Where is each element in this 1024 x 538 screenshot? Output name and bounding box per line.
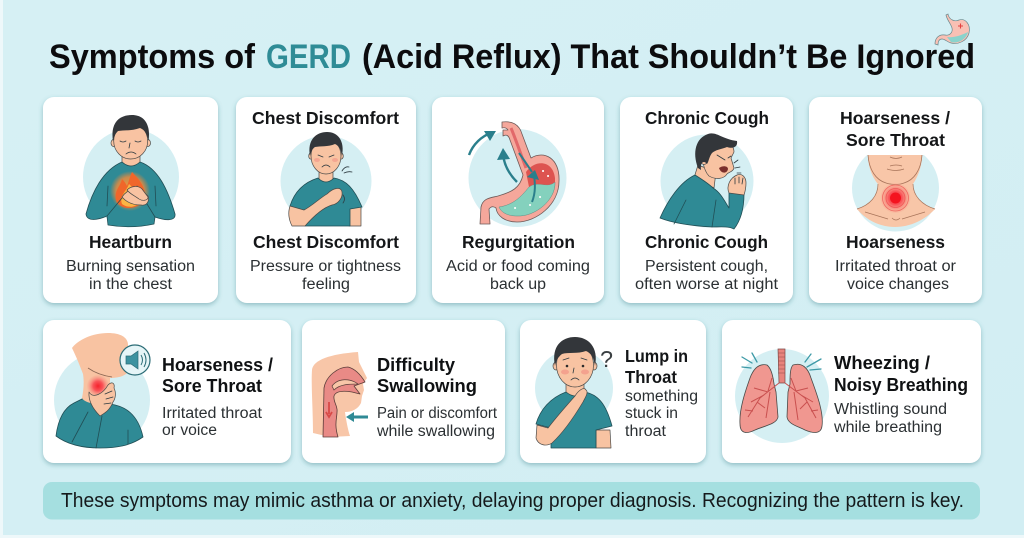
panel: wheezing	[722, 320, 981, 463]
heading: Lump in	[625, 346, 688, 366]
title: Symptoms of	[49, 38, 256, 76]
heading: Noisy Breathing	[834, 374, 968, 395]
heading: Chronic Cough	[645, 232, 768, 252]
icon: person holding chest	[280, 132, 372, 226]
heading: Sore Throat	[162, 375, 262, 396]
description	[250, 258, 401, 293]
card background	[722, 320, 981, 463]
title	[49, 38, 975, 76]
heading: Hoarseness	[846, 232, 945, 252]
description: feeling	[302, 276, 350, 293]
heading	[377, 354, 477, 396]
description: back up	[490, 276, 546, 293]
description: Pain or discomfort	[377, 405, 498, 422]
icon: stomach with reflux arrows	[468, 122, 566, 227]
description: Whistling sound	[834, 401, 947, 418]
description	[446, 258, 590, 293]
icon: person with burning chest	[83, 115, 179, 227]
top label	[840, 108, 950, 150]
description: Irritated throat	[162, 405, 263, 422]
icon: worried person touching throat: ?	[600, 346, 613, 372]
title: GERD	[266, 38, 351, 76]
panel: hoarseness and sore throat	[43, 320, 291, 463]
panel: heartburn	[43, 97, 218, 303]
heading	[162, 354, 273, 396]
description: throat	[625, 423, 667, 440]
card background	[520, 320, 706, 463]
description: stuck in	[625, 405, 678, 422]
description: Persistent cough,	[645, 258, 768, 275]
top label: Chronic Cough	[645, 108, 769, 128]
description: or voice	[162, 422, 217, 439]
icon: lungs	[735, 349, 829, 443]
callout banner	[43, 482, 980, 520]
icon: person coughing	[660, 133, 754, 229]
description	[376, 405, 498, 440]
description: Acid or food coming	[446, 258, 590, 275]
top label: Hoarseness /	[840, 108, 950, 128]
icon: small stomach	[935, 14, 969, 45]
card background	[302, 320, 505, 463]
icon: throat cross-section with arrow	[312, 352, 368, 437]
callout banner: These symptoms may mimic asthma or anxiety, delaying proper diagnosis. Recognizing the pattern is key.	[61, 490, 964, 512]
description	[66, 258, 195, 293]
description	[835, 258, 956, 293]
card background	[43, 320, 291, 463]
description: while swallowing	[376, 423, 495, 440]
icon: worried person touching throat	[535, 337, 613, 448]
description: Pressure or tightness	[250, 258, 401, 275]
heading: Heartburn	[89, 232, 172, 252]
description	[635, 258, 779, 293]
heading: Chest Discomfort	[253, 232, 399, 252]
heading: Difficulty	[377, 354, 456, 375]
description: while breathing	[833, 419, 942, 436]
description: often worse at night	[635, 276, 779, 293]
description: Burning sensation	[66, 258, 195, 275]
card background	[809, 97, 982, 303]
description	[833, 401, 947, 436]
heading	[834, 352, 968, 395]
top label: Sore Throat	[846, 130, 945, 150]
description	[625, 388, 698, 440]
card background	[236, 97, 416, 303]
heading: Hoarseness /	[162, 354, 273, 375]
title: (Acid Reflux) That Shouldn’t Be Ignored	[362, 38, 975, 76]
heading: Wheezing /	[834, 352, 930, 373]
heading: Regurgitation	[462, 232, 575, 252]
panel: hoarseness	[809, 97, 982, 303]
panel: regurgitation	[432, 97, 604, 303]
description: something	[625, 388, 698, 405]
description: in the chest	[89, 276, 173, 293]
heading	[625, 346, 688, 387]
heading: Throat	[625, 367, 677, 387]
top label: Chest Discomfort	[252, 108, 399, 128]
description: voice changes	[847, 276, 949, 293]
panel: chest discomfort	[236, 97, 416, 303]
heading: Swallowing	[377, 375, 477, 396]
panel: chronic cough	[620, 97, 793, 303]
card background	[620, 97, 793, 303]
panel: difficulty swallowing	[302, 320, 505, 463]
description: Irritated throat or	[835, 258, 956, 275]
panel: lump in throat	[520, 320, 706, 463]
card background	[432, 97, 604, 303]
icon: person holding sore throat with speaker	[54, 333, 150, 448]
icon: red irritated throat	[852, 155, 939, 232]
card background	[43, 97, 218, 303]
description	[162, 405, 263, 439]
